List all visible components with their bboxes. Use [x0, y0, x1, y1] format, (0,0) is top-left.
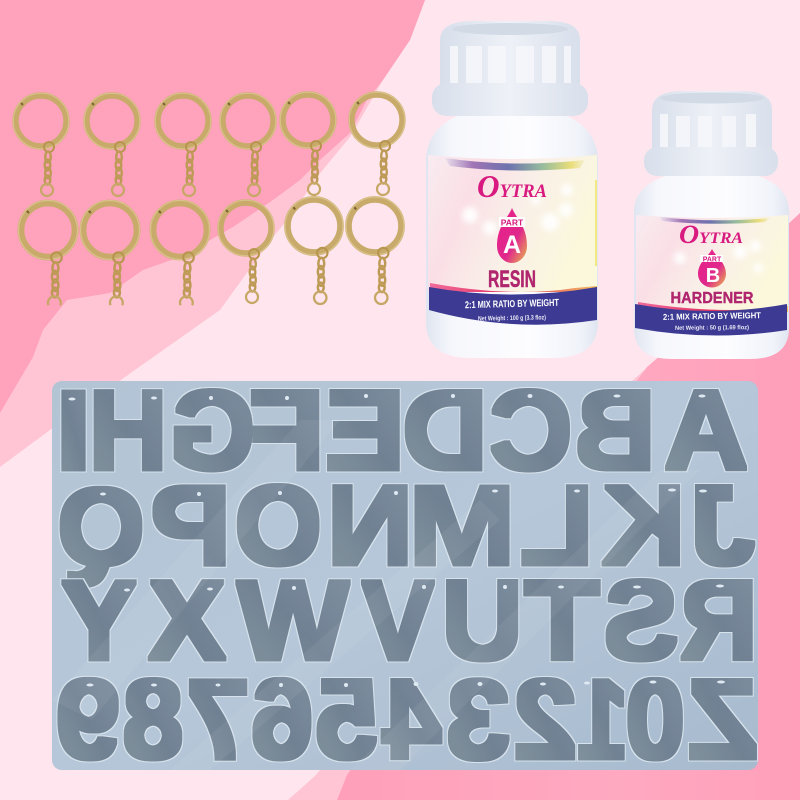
bottle: Part A resin	[426, 21, 598, 358]
mold letters: row 4 Z and digits, mirrored: Z	[688, 657, 758, 782]
mold letters: row 3 R to Y, mirrored: U	[442, 558, 522, 683]
mold letters: row 4 Z and digits, mirrored: 4	[382, 658, 442, 783]
mold letters: row 4 Z and digits, mirrored: 7	[186, 657, 250, 782]
mold letters: row 4 Z and digits, mirrored: 6	[251, 657, 313, 782]
bottle A cap	[440, 21, 580, 97]
bottle A RESIN text: RESIN	[488, 266, 536, 293]
bottle B body	[634, 174, 789, 359]
mold light streaks	[152, 430, 496, 758]
bottle: Part B hardener	[634, 91, 789, 359]
mold letters: row 4 Z and digits, mirrored: 5	[316, 657, 378, 782]
bottle B cap	[652, 91, 772, 157]
mold letters: row 4 Z and digits, mirrored: 8	[123, 658, 183, 782]
bottle A blue band	[429, 287, 597, 325]
mold letters: row 1 A to I, mirrored: G	[169, 369, 255, 493]
bottle B label	[636, 215, 788, 312]
bottle B part drop	[698, 249, 726, 288]
bottle B blue band	[635, 304, 787, 336]
mold letters: row 2 J to Q, mirrored: M	[408, 463, 516, 588]
keyrings: top row	[13, 92, 405, 196]
mold letters: row 1 A to I, mirrored: B	[575, 368, 655, 493]
mold letters: row 3 R to Y, mirrored: S	[604, 558, 678, 683]
bottle B HARDENER text: HARDENER	[670, 290, 754, 307]
mold letters: row 2 J to Q, mirrored: K	[603, 463, 685, 588]
bottle A label	[428, 155, 597, 292]
mold letters: row 4 Z and digits, mirrored	[56, 657, 758, 783]
bottle B Oytra logo: OYTRA	[679, 220, 743, 249]
mold letters: row 1 A to I, mirrored: I	[55, 369, 92, 493]
bottle B net weight text: Net Weight : 50 g (1.69 floz)	[675, 325, 749, 332]
bottle A net weight text: Net Weight : 100 g (3.3 floz)	[478, 314, 546, 323]
mold letters: row 4 Z and digits, mirrored: 0	[625, 658, 685, 783]
bottle B collar	[644, 147, 778, 176]
mold letters: row 1 A to I, mirrored: A	[664, 369, 748, 494]
mold letters: row 1 A to I, mirrored: F	[249, 368, 325, 493]
bottle A mix ratio text: 2:1 MIX RATIO BY WEIGHT	[465, 298, 559, 311]
mold letters: row 4 Z and digits, mirrored: 9	[56, 658, 120, 783]
mold letters: row 1 A to I, mirrored: C	[490, 368, 572, 493]
mold letters: row 4 Z and digits, mirrored: 2	[513, 657, 577, 782]
bottle A part drop: PART	[501, 218, 524, 228]
mold letters: row 4 Z and digits, mirrored: 3	[446, 657, 510, 782]
mold letters: row 2 J to Q, mirrored: N	[327, 463, 413, 588]
mold letters: row 2 J to Q, mirrored: O	[234, 463, 322, 588]
mold hanging holes	[68, 394, 725, 687]
mold tray	[52, 381, 758, 770]
mold letters: row 3 R to Y, mirrored: T	[524, 557, 600, 683]
mold letters: row 2 J to Q, mirrored: J	[689, 464, 755, 588]
bottle B part drop: B	[706, 265, 720, 287]
bottle A collar	[432, 83, 588, 116]
silicone alphabet mold	[52, 367, 758, 783]
mold letters: row 2 J to Q, mirrored: P	[151, 462, 231, 588]
mold letters: row 1 A to I, mirrored: H	[89, 369, 167, 493]
mold letters: row 1 A to I, mirrored: E	[325, 367, 405, 493]
bottle A Oytra logo: OYTRA	[477, 168, 547, 204]
mold letters: row 3 R to Y, mirrored: W	[237, 559, 349, 683]
bottle A part drop: A	[503, 231, 521, 259]
mold letters: row 1 A to I, mirrored	[55, 367, 748, 494]
mold letters: row 2 J to Q, mirrored	[57, 462, 755, 588]
keyrings: bottom row	[19, 197, 404, 305]
mold letters: row 3 R to Y, mirrored: R	[681, 559, 757, 684]
mold letters: row 3 R to Y, mirrored: V	[362, 559, 433, 684]
mold letters: row 1 A to I, mirrored: D	[402, 369, 488, 493]
mold letters: row 2 J to Q, mirrored: Q	[57, 467, 145, 588]
bottle A part drop	[497, 208, 527, 263]
mold letters: row 4 Z and digits, mirrored: 1	[578, 658, 628, 782]
mold letters: row 2 J to Q, mirrored: L	[520, 462, 594, 588]
bottle B mix ratio text: 2:1 MIX RATIO BY WEIGHT	[663, 310, 762, 322]
mold letters: row 3 R to Y, mirrored: Y	[62, 558, 136, 683]
mold letters: row 3 R to Y, mirrored	[62, 557, 757, 684]
bottle B part drop: PART	[703, 256, 722, 264]
bottle A body	[426, 111, 598, 358]
mold letters: row 3 R to Y, mirrored: X	[149, 558, 225, 683]
